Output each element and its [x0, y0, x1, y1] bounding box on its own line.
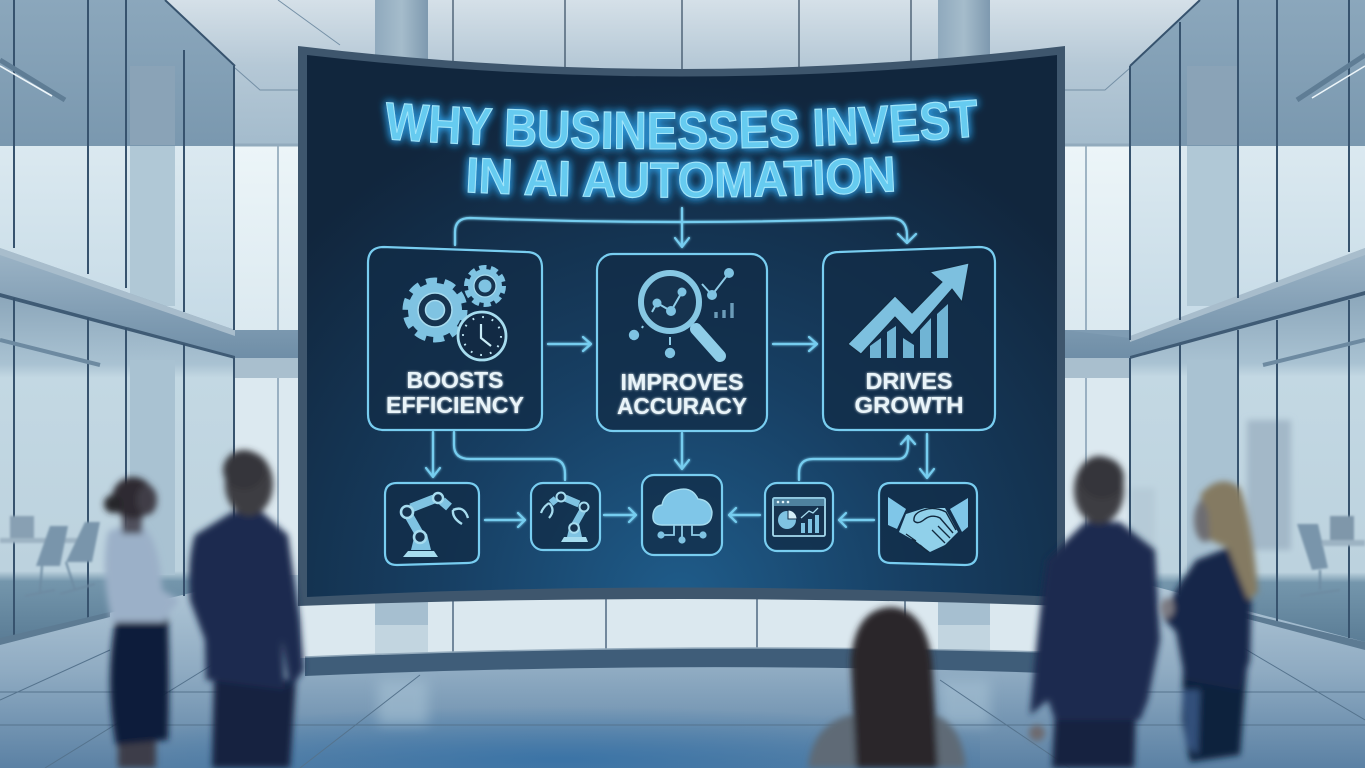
label: improves: IMPROVES — [620, 369, 744, 395]
label: boosts: BOOSTS — [406, 367, 504, 393]
panel: drives growth — [823, 247, 995, 430]
icon: clock — [458, 312, 506, 360]
icon: robot arm — [401, 493, 468, 557]
display screen — [298, 46, 1065, 606]
person: man right — [1029, 456, 1160, 768]
arrow: dashboard to drives — [799, 436, 915, 480]
arrow: boosts to robot arm — [426, 432, 440, 477]
label: growth: GROWTH — [854, 392, 964, 418]
panel: dashboard — [765, 483, 833, 551]
arrow: drives to handshake — [920, 434, 934, 478]
icon: small gear — [467, 268, 503, 304]
arrow: boosts to second robot — [454, 432, 565, 480]
icon: dashboard window — [773, 498, 825, 536]
arrow: robot to cloud — [604, 508, 636, 522]
connector arrows — [426, 208, 934, 527]
screen frame — [298, 46, 1065, 606]
arrow: handshake to dashboard — [839, 513, 874, 527]
person: woman left — [104, 477, 180, 768]
arrow: robot to robot — [485, 513, 525, 527]
panel: robot arm one — [385, 483, 479, 565]
icon: large gear — [407, 282, 463, 338]
panel: robot arm two — [531, 483, 600, 550]
person: woman right — [1160, 481, 1258, 762]
label: drives: DRIVES — [866, 368, 952, 394]
title line 2: IN AI AUTOMATION — [460, 149, 902, 206]
arrow: dashboard to cloud — [729, 508, 760, 522]
glass wall: right — [1065, 0, 1365, 650]
arrow: boosts to improves — [548, 337, 591, 351]
arrow: top bus to drives growth — [455, 218, 916, 245]
person: man left — [189, 450, 304, 768]
title — [379, 92, 984, 206]
glass wall: left — [0, 0, 300, 645]
label: efficiency: EFFICIENCY — [386, 392, 524, 418]
screen surface — [307, 55, 1057, 597]
conference chairs: left — [0, 516, 100, 596]
icon: magnifier with chart — [629, 268, 734, 358]
panel: handshake — [879, 483, 977, 565]
panel: boosts efficiency — [368, 247, 542, 430]
person: woman centre foreground — [808, 607, 966, 768]
icon: robot arm — [541, 492, 588, 542]
label: accuracy: ACCURACY — [617, 393, 747, 419]
floor plinth and tile lines — [0, 640, 1365, 768]
arrow: title to improves accuracy — [675, 208, 689, 247]
arrow: improves to cloud — [675, 433, 689, 469]
conference chairs: right — [1297, 516, 1365, 596]
title line 1: WHY BUSINESSES INVEST — [379, 92, 984, 160]
panel: improves accuracy — [597, 254, 767, 431]
icon: growth arrow with bars — [848, 263, 969, 358]
icon: handshake — [888, 497, 968, 552]
panel: cloud — [642, 475, 722, 555]
arrow: improves to drives — [773, 337, 817, 351]
icon: cloud network — [653, 489, 712, 544]
